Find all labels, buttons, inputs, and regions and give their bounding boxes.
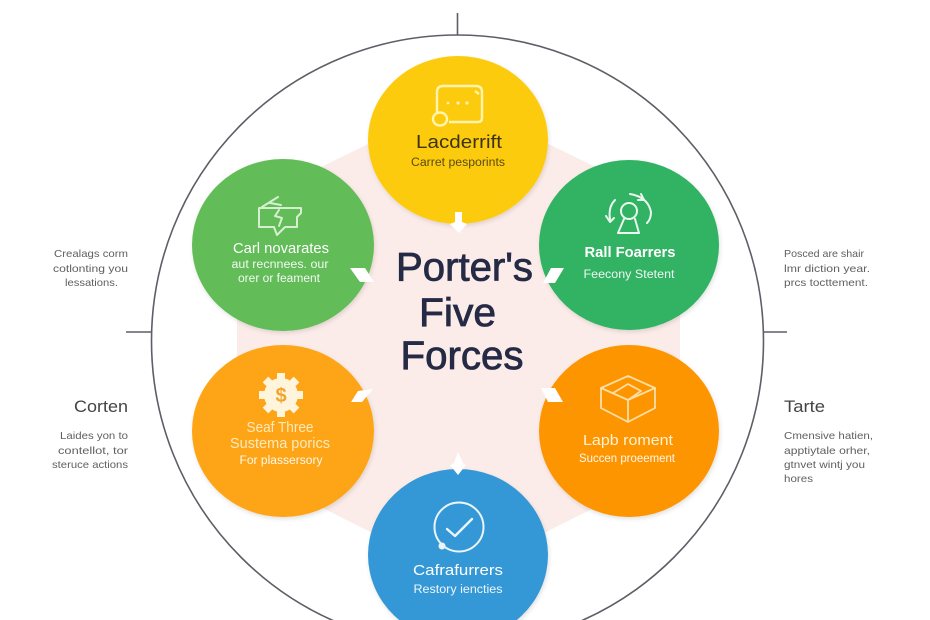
- icon: person with arrows: [606, 194, 651, 233]
- subtext: Succen proeement: [579, 453, 676, 465]
- title: [396, 246, 533, 378]
- heading: Cafrafurrers: [413, 562, 503, 579]
- side note: top left: lessations.: [65, 277, 118, 289]
- heading: Seaf Three: [246, 419, 314, 436]
- heading: Rall Foarrers: [584, 244, 676, 261]
- side note: bottom right: apptiytale orher,: [784, 445, 870, 457]
- side note: bottom right: gtnvet wintj you: [784, 459, 865, 471]
- outer ring with ticks: [126, 13, 787, 620]
- side note: top right: Posced are shair: [784, 248, 865, 260]
- pink hexagon background: [237, 100, 680, 576]
- side note: bottom left: Corten: [74, 397, 128, 416]
- force circle: left orange: Sustema porics: [230, 435, 330, 452]
- side note: top right: [784, 248, 870, 289]
- title: Porter's: [396, 246, 533, 290]
- side note: bottom right: Tarte: [784, 397, 825, 416]
- title: Five: [419, 291, 496, 335]
- icon: gear with dollar: $: [275, 385, 287, 407]
- heading: Lacderrift: [416, 132, 502, 152]
- side note: top left: cotlonting you: [53, 263, 128, 275]
- icon: broken card: [259, 197, 301, 235]
- force circle: light green: [192, 159, 374, 331]
- side note: top left: [53, 248, 128, 289]
- side note: top right: lmr diction year.: [784, 263, 870, 275]
- subtext: Restory iencties: [414, 584, 503, 596]
- force circle: left orange: [192, 345, 374, 517]
- side note: bottom left: Laides yon to: [60, 430, 128, 442]
- subtext: aut recnnees. our: [232, 259, 329, 271]
- icon: chat window: [433, 86, 482, 126]
- side note: bottom right: hores: [784, 473, 813, 485]
- force circle: right orange: [539, 345, 719, 517]
- force circle: yellow: [368, 56, 548, 224]
- icon: check circle: [434, 502, 484, 552]
- subtext: Feecony Stetent: [584, 269, 675, 281]
- subtext: For plassersory: [240, 455, 323, 467]
- side note: bottom left: steruce actions: [52, 459, 128, 471]
- title: Forces: [400, 334, 524, 378]
- arrows pointing to centre: [350, 212, 564, 475]
- heading: Lapb roment: [583, 432, 674, 449]
- subtext: Carret pesporints: [411, 157, 505, 169]
- side note: top left: Crealags corm: [54, 248, 128, 260]
- side note: bottom right: [784, 397, 873, 485]
- icon: open box: [601, 376, 655, 422]
- side note: bottom right: Cmensive hatien,: [784, 430, 873, 442]
- force circle: dark green: [539, 160, 719, 330]
- icon: gear with dollar: [259, 373, 303, 417]
- side note: bottom left: contellot, tor: [58, 445, 129, 457]
- heading: Carl novarates: [233, 240, 329, 257]
- side note: top right: prcs tocttement.: [784, 277, 868, 289]
- force circle: light green: orer or feament: [238, 273, 321, 285]
- force circle: blue: [368, 469, 548, 620]
- side note: bottom left: [52, 397, 129, 471]
